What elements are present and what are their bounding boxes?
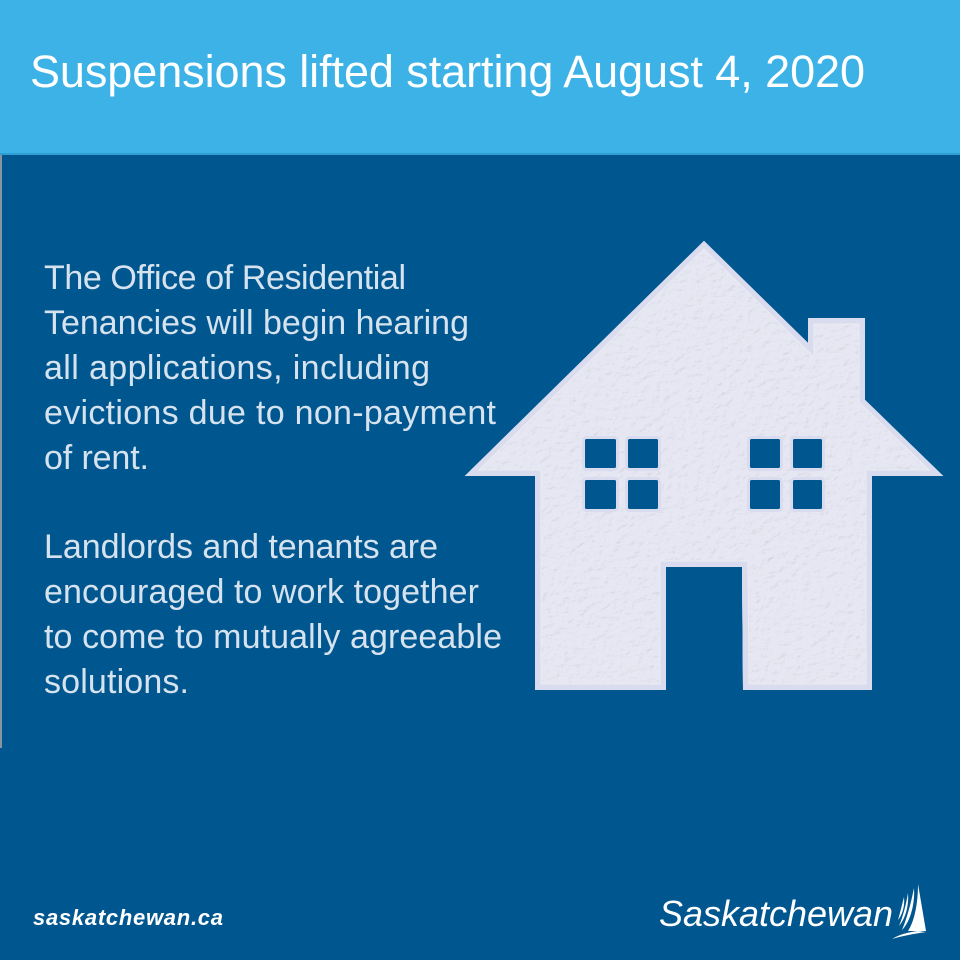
bevel highlight line [479, 249, 929, 684]
body text: first paragraph: of rent. [44, 439, 149, 477]
body text: first paragraph: The Office of Residential [44, 259, 406, 297]
body text: second paragraph: solutions. [44, 663, 189, 701]
icon: sail mark [892, 884, 926, 939]
logo wordmark: Saskatchewan [659, 893, 893, 934]
body text: first paragraph: Tenancies will begin hearing [44, 304, 469, 342]
website url: saskatchewan.ca [33, 905, 223, 930]
body text: second paragraph: Landlords and tenants are [44, 528, 438, 566]
body text: first paragraph: evictions due to non-payment [44, 394, 497, 432]
body text: second paragraph [44, 528, 502, 701]
house silhouette [465, 241, 943, 690]
logo: Saskatchewan wordmark and sail [659, 884, 926, 939]
title: Suspensions lifted starting August 4, 2020 [30, 46, 865, 97]
window frames [584, 438, 824, 510]
embossed outline bevel [472, 245, 936, 687]
body text: first paragraph [44, 259, 497, 477]
header band [0, 0, 960, 155]
body text: second paragraph: to come to mutually agreeable [44, 618, 502, 656]
body text: first paragraph: all applications, including [44, 349, 430, 387]
icon: embossed paper house [465, 241, 943, 690]
body text: second paragraph: encouraged to work together [44, 573, 479, 611]
